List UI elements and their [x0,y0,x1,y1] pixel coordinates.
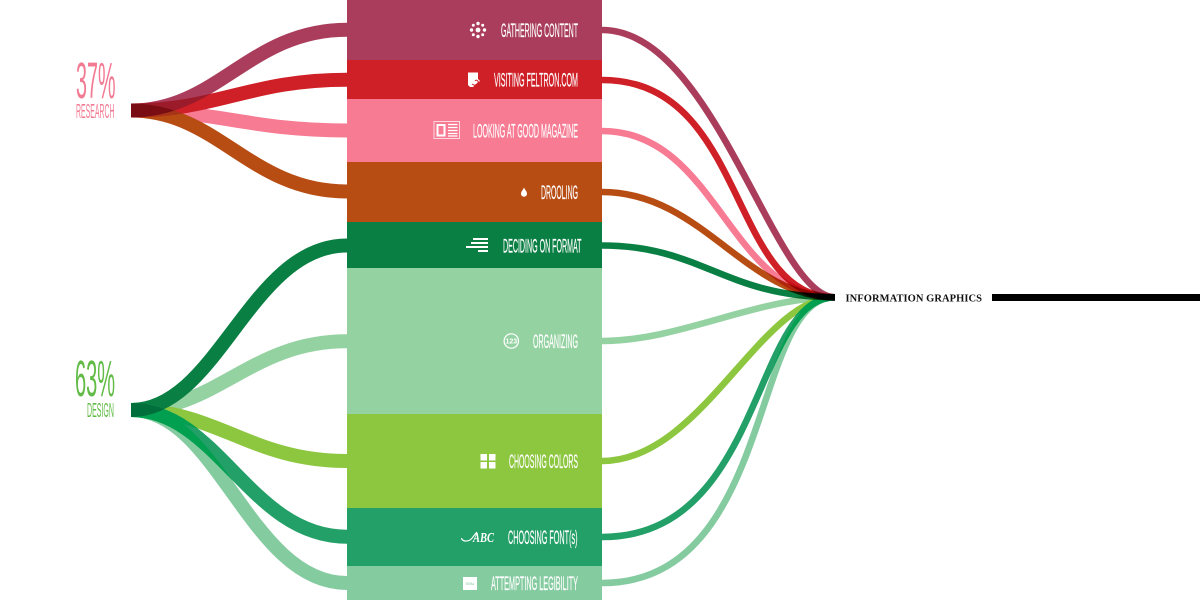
text: GATHERING CONTENT [501,21,578,42]
text: CHOOSING FONT(s) [508,528,578,549]
icon: drop [521,188,527,197]
text: RESEARCH [76,101,114,123]
text: CHOOSING COLORS [509,452,578,473]
text: LOOKING AT GOOD MAGAZINE [473,121,578,142]
text: DECIDING ON FORMAT [503,236,582,257]
icon: web page [468,72,480,87]
icon: 123 badge [504,334,518,348]
icon: ABC swash: ABC [472,531,494,546]
icon: ABC swash [462,531,494,546]
information graphics label: INFORMATION GRAPHICS [846,293,982,304]
icon: format lines [466,238,488,252]
text: DROOLING [541,183,578,204]
icon: gathering dots [470,22,486,38]
icon: 123 badge: 123 [505,338,517,346]
design flows [131,246,347,583]
output bar [992,294,1200,301]
column of activity bands [347,0,602,600]
icon: legibility sample [463,577,477,590]
icon: colour squares [480,454,496,468]
icon: legibility sample: SMU [466,581,475,586]
text: 37% [76,52,116,109]
output flows from research [602,30,835,297]
icon: open magazine [434,122,460,138]
text: ATTEMPTING LEGIBILITY [491,574,578,595]
research flows [131,30,347,192]
output flows from design [602,297,835,583]
text: DESIGN [87,400,114,422]
text: 63% [75,350,115,407]
text: ORGANIZING [533,332,578,353]
text: VISITING FELTRON.COM [494,71,578,92]
